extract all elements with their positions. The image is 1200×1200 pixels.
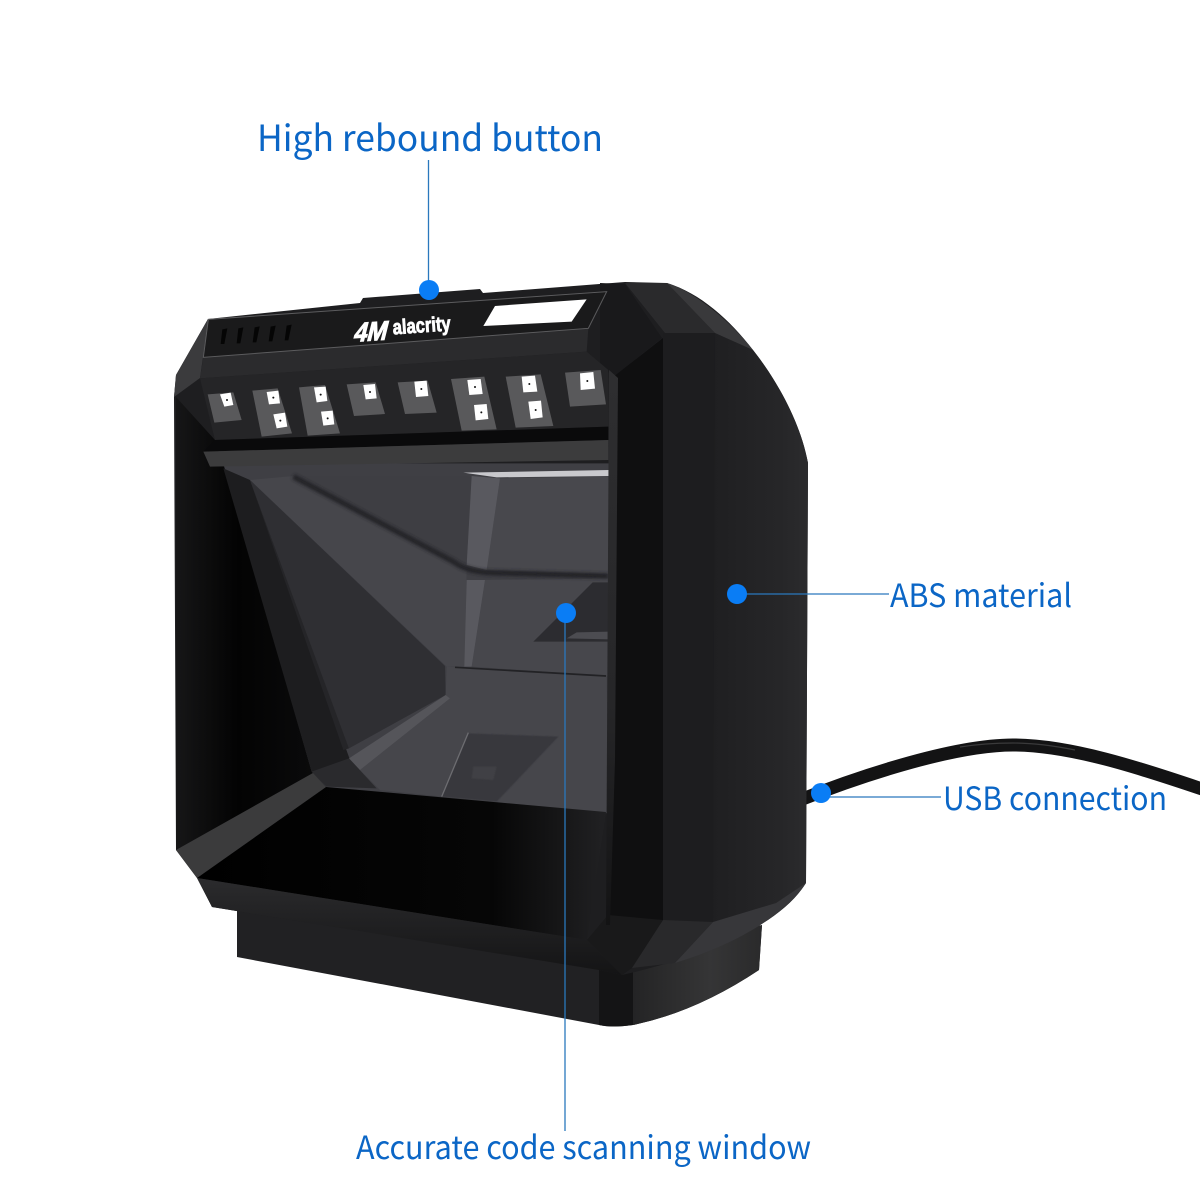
callout: USB connection: USB connection (943, 774, 1167, 820)
callout: USB connection (811, 774, 1167, 820)
logo (349, 311, 452, 348)
callout: high rebound button (257, 110, 603, 300)
left top bevel (174, 319, 208, 397)
callout: ABS material: ABS material (890, 571, 1072, 617)
window right mid plane (472, 578, 608, 676)
callout: accurate code scanning window: Accurate code scanning window (356, 1123, 811, 1169)
horizon line (455, 667, 606, 676)
top control area (200, 292, 608, 467)
window right edge strip (606, 370, 618, 925)
window top plane (293, 476, 472, 567)
front lip (197, 878, 622, 975)
scanner body (174, 282, 808, 975)
window light band (250, 476, 467, 667)
label window (483, 299, 587, 326)
sensor strip (200, 352, 608, 440)
dark crease (293, 477, 608, 576)
window dark face (250, 480, 446, 748)
lower dark reflection (442, 733, 558, 802)
gray bar (203, 440, 608, 467)
reflection inner (472, 767, 497, 780)
window dark left wedge (223, 468, 350, 787)
lower right facets (587, 883, 806, 975)
sensor LED centres (226, 380, 588, 422)
window right top plane (487, 477, 609, 574)
left wall of window (176, 397, 313, 850)
scanner base (237, 905, 762, 1026)
top panel (203, 292, 607, 357)
barcode scanner (174, 282, 808, 1026)
callout: high rebound button: High rebound button (257, 110, 603, 162)
sensor LEDs (220, 372, 595, 428)
vents (221, 325, 292, 344)
floor of window (197, 787, 606, 940)
top right facets (600, 283, 753, 377)
callout: accurate code scanning window (356, 603, 811, 1169)
logo: 4M (351, 315, 392, 348)
middle vertical band (663, 333, 715, 925)
bright sliver (463, 470, 609, 477)
USB cable (800, 743, 1200, 800)
band under top panel (200, 328, 588, 378)
scanning window (223, 463, 609, 813)
light diagonal band (349, 695, 450, 770)
sensor patches (208, 370, 606, 437)
aperture strip (567, 632, 609, 639)
window left light face (250, 480, 349, 750)
speckled columns (464, 476, 500, 667)
left diagonal gray band (176, 773, 326, 878)
reflection edge (442, 733, 468, 797)
dark triangle aperture (533, 582, 609, 642)
callout: ABS material (727, 571, 1072, 617)
side panel (713, 333, 808, 923)
corner facet (312, 758, 377, 788)
logo: alacrity (392, 312, 452, 339)
lower plane (360, 667, 608, 813)
inner dark bezel (608, 338, 663, 925)
black slit (203, 427, 608, 452)
